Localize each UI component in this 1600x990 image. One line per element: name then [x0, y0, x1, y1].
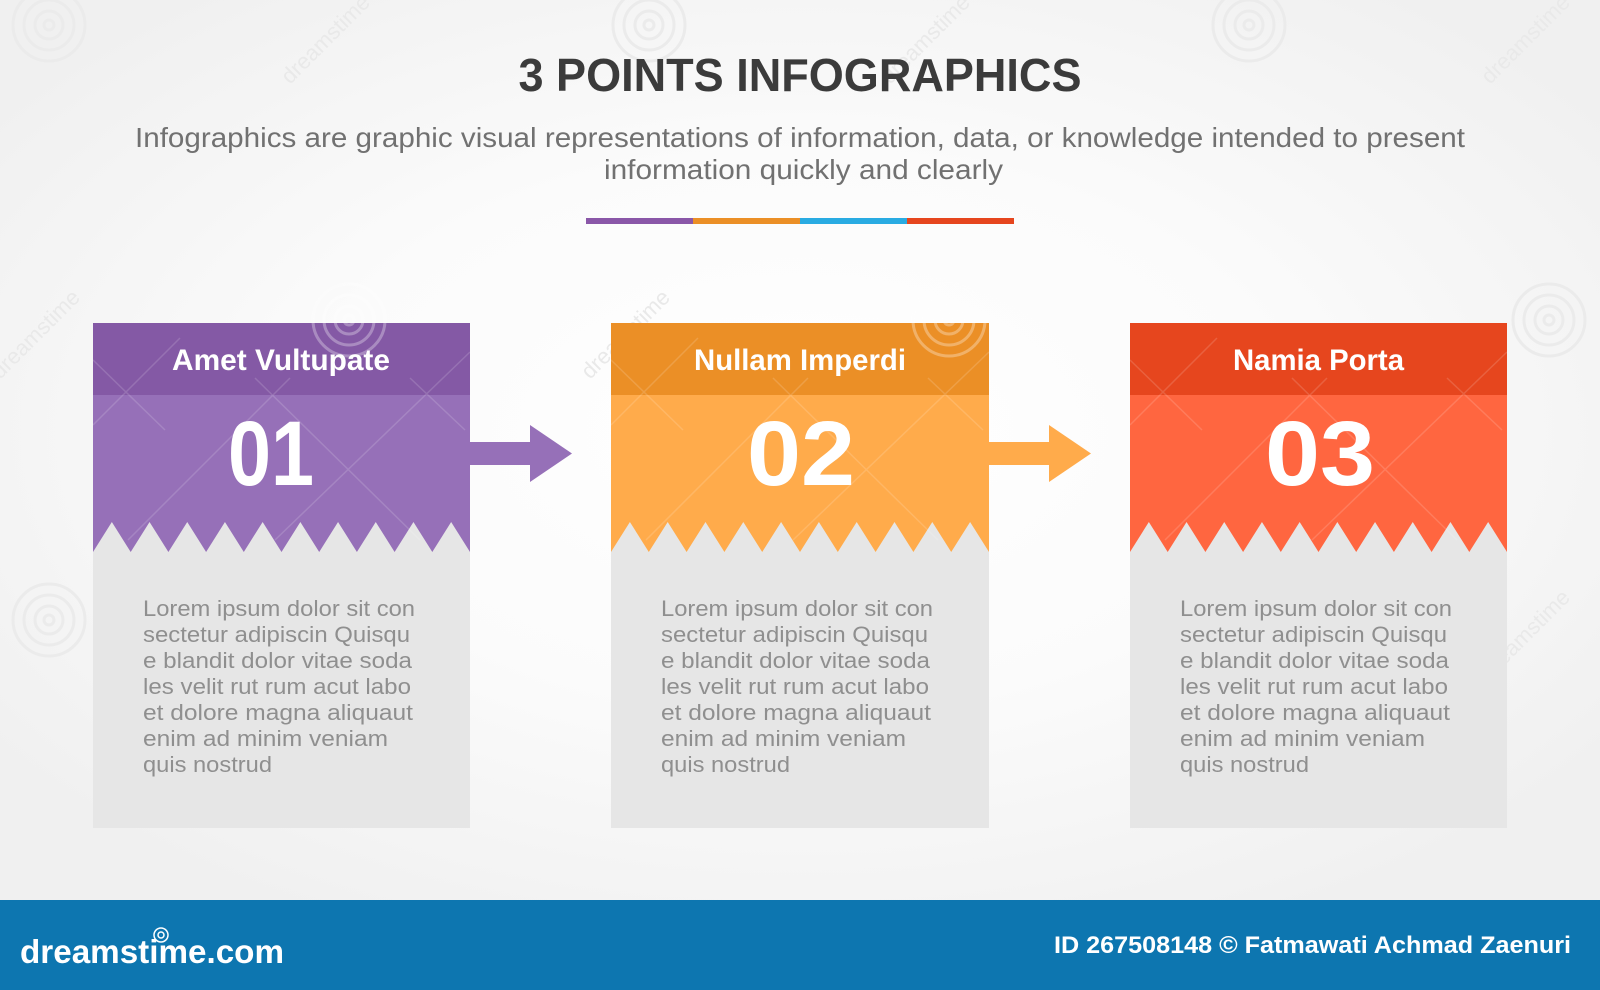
- panel 3 body text: sectetur adipiscin Quisqu: [1180, 622, 1447, 647]
- panel 3 header band: [1130, 323, 1507, 395]
- panel 2 body text: les velit rut rum acut labo: [661, 674, 929, 699]
- panel 3 body text: e blandit dolor vitae soda: [1180, 648, 1450, 673]
- panel 2 gray body: [611, 515, 989, 828]
- watermark spirals and text on background: [0, 0, 1585, 684]
- footer logo: dreamstime.com: [20, 933, 284, 970]
- panel 3 number: 03: [1265, 403, 1375, 505]
- panel 1 body text: Lorem ipsum dolor sit con: [143, 596, 415, 621]
- panel 1 body text: les velit rut rum acut labo: [143, 674, 411, 699]
- footer credit: ID 267508148 © Fatmawati Achmad Zaenuri: [1054, 932, 1571, 959]
- panel 1 gray body: [93, 515, 470, 828]
- panel 2 body text: e blandit dolor vitae soda: [661, 648, 931, 673]
- panel 1 header band: [93, 323, 470, 395]
- panel 3 body text: [1180, 596, 1452, 777]
- panel 1 arrow: [470, 425, 572, 482]
- panel 3 body text: les velit rut rum acut labo: [1180, 674, 1448, 699]
- subtitle: [135, 122, 1465, 185]
- panel 3 heading: Namia Porta: [1233, 344, 1404, 377]
- panel 1 number: 01: [228, 403, 314, 505]
- panel 3 body text: Lorem ipsum dolor sit con: [1180, 596, 1452, 621]
- panel 2 header band: [611, 323, 989, 395]
- panel 2 heading: Nullam Imperdi: [694, 344, 906, 377]
- footer logo spiral: [154, 928, 168, 942]
- watermark spirals and diagonals over panels: [93, 284, 1507, 540]
- panel 2 body text: sectetur adipiscin Quisqu: [661, 622, 928, 647]
- panel 2: [611, 323, 1091, 828]
- footer bar: [0, 900, 1600, 990]
- subtitle: information quickly and clearly: [604, 154, 1003, 185]
- panel 1 heading: Amet Vultupate: [172, 344, 390, 377]
- colored divider bar: [586, 218, 1014, 224]
- panel 2 body text: enim ad minim veniam: [661, 726, 906, 751]
- panel 2 body text: et dolore magna aliquaut: [661, 700, 931, 725]
- panel 1: [93, 323, 572, 828]
- subtitle: Infographics are graphic visual representations of information, data, or knowledge intended to present: [135, 122, 1465, 153]
- panel 1 body text: quis nostrud: [143, 752, 272, 777]
- watermark spirals and text on background: dreamstime: [1476, 585, 1575, 684]
- panel 1 body text: enim ad minim veniam: [143, 726, 388, 751]
- panel 3 colored block with zigzag edge: [1130, 395, 1507, 552]
- watermark spirals and text on background: dreamstime: [576, 285, 675, 384]
- panel 1 colored block with zigzag edge: [93, 395, 470, 552]
- panel 2 body text: Lorem ipsum dolor sit con: [661, 596, 933, 621]
- panel 2 arrow: [989, 425, 1091, 482]
- panel 3 gray body: [1130, 515, 1507, 828]
- panel 3: [1130, 323, 1507, 828]
- panel 1 body text: [143, 596, 415, 777]
- panel 1 body text: sectetur adipiscin Quisqu: [143, 622, 410, 647]
- panel 3 body text: et dolore magna aliquaut: [1180, 700, 1450, 725]
- panel 3 body text: enim ad minim veniam: [1180, 726, 1425, 751]
- panel 3 body text: quis nostrud: [1180, 752, 1309, 777]
- panel 2 body text: quis nostrud: [661, 752, 790, 777]
- panel 2 body text: [661, 596, 933, 777]
- panel 1 body text: e blandit dolor vitae soda: [143, 648, 413, 673]
- panel 2 number: 02: [747, 403, 855, 505]
- title: 3 POINTS INFOGRAPHICS: [518, 49, 1082, 101]
- panel 2 colored block with zigzag edge: [611, 395, 989, 552]
- panel 1 body text: et dolore magna aliquaut: [143, 700, 413, 725]
